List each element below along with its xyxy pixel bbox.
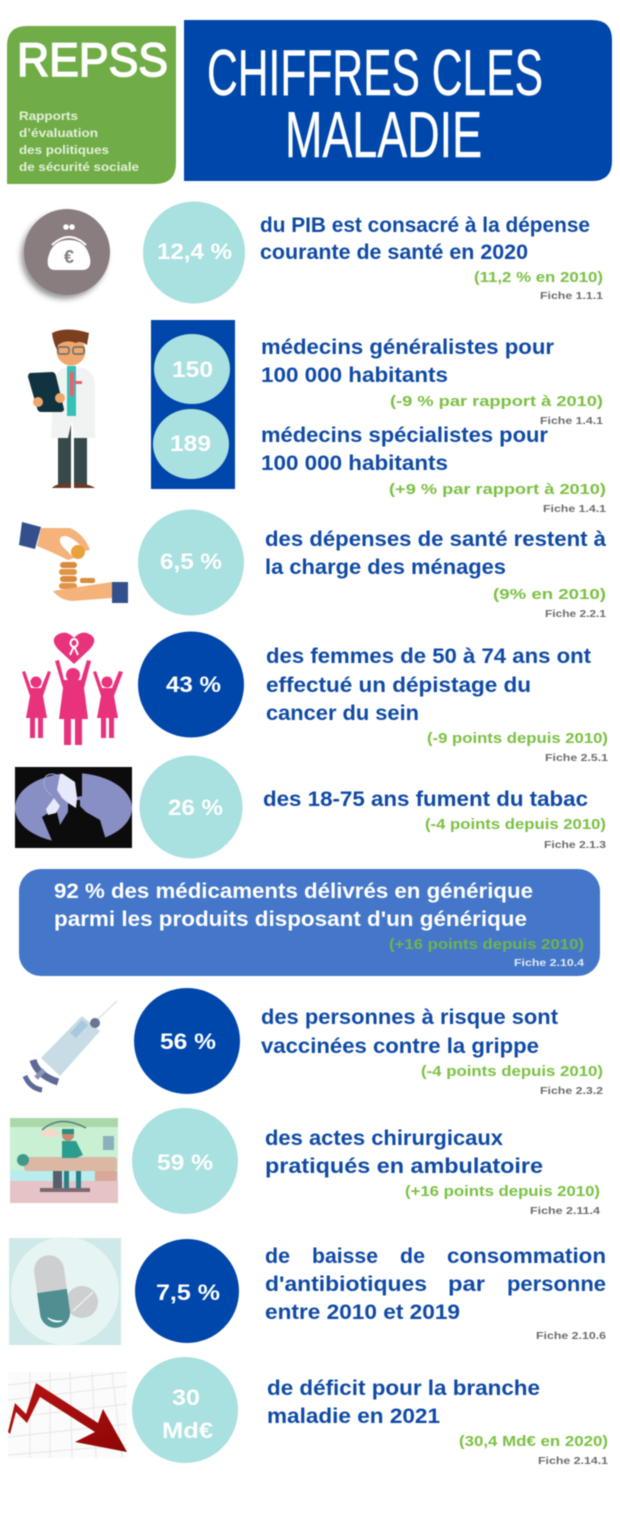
text block (261, 1006, 603, 1097)
text block: pratiqués en ambulatoire (265, 1155, 543, 1178)
text block: Fiche 2.14.1 (538, 1455, 608, 1467)
text block: (+16 points depuis 2010) (405, 1183, 600, 1200)
text block: des femmes de 50 à 74 ans ont (266, 645, 591, 668)
text block: spécialistes: 100 000 habitants (261, 452, 448, 475)
icon: money bag (21, 209, 110, 299)
text block: cancer du sein (266, 702, 419, 725)
text block: consommation (447, 1245, 606, 1268)
text block: Fiche 2.1.3 (544, 839, 606, 851)
stat circle (143, 202, 245, 304)
panel: génériques banner (19, 869, 600, 976)
text block: par (448, 1273, 485, 1296)
panel: REPSS logo (7, 26, 176, 184)
text block: baisse (312, 1245, 378, 1268)
stat circle: 56 % (160, 1029, 216, 1054)
text block: Fiche 2.2.1 (545, 608, 606, 620)
stat circle: 59 % (157, 1150, 213, 1175)
panel: blue counters: 189 (170, 431, 211, 456)
icon: smoker (15, 767, 132, 848)
stat circle (135, 1239, 239, 1343)
text block: généralistes (261, 336, 603, 427)
text block: (-4 points depuis 2010) (425, 816, 606, 833)
text block: spécialistes: (+9 % par rapport à 2010) (389, 481, 606, 498)
panel: blue counters: 150 (172, 357, 213, 382)
text block: Fiche 1.1.1 (540, 290, 603, 302)
panel: génériques banner: Fiche 2.10.4 (514, 957, 584, 969)
text block (265, 1245, 606, 1342)
stat circle: Md€ (162, 1418, 213, 1443)
panel: title banner (184, 20, 612, 181)
stat circle: 26 % (168, 795, 223, 820)
icon: women and ribbon heart (22, 633, 123, 745)
icon: hands and coins (19, 522, 128, 603)
row: reste à charge (19, 510, 606, 620)
row: PIB (21, 202, 603, 304)
text block: personne (507, 1273, 606, 1296)
panel: REPSS logo: Rapports (19, 109, 78, 123)
text block: généralistes: médecins généralistes pour (261, 336, 554, 359)
panel: REPSS logo: d’évaluation (19, 126, 98, 140)
text block: effectué un dépistage du (266, 674, 531, 697)
text block: spécialistes: médecins spécialistes pour (261, 424, 548, 447)
text block: (11,2 % en 2010) (474, 269, 603, 286)
panel: REPSS logo: des politiques (19, 143, 109, 157)
text block (260, 214, 603, 302)
panel: génériques banner: (+16 points depuis 2010) (389, 936, 584, 953)
text block: de (400, 1245, 425, 1268)
text block (265, 1127, 600, 1217)
stat circle: 6,5 % (160, 549, 222, 574)
stat circle: 7,5 % (156, 1280, 220, 1305)
panel: génériques banner: 92 % des médicaments délivrés en générique (54, 880, 533, 903)
stat circle (138, 632, 244, 738)
row: ambulatoire (10, 1108, 600, 1217)
icon: pills (9, 1237, 121, 1345)
text block: d'antibiotiques (265, 1273, 427, 1296)
text block: du PIB est consacré à la dépense (260, 214, 590, 237)
panel: REPSS logo: de sécurité sociale (19, 160, 139, 174)
icon: falling chart arrow (8, 1372, 127, 1458)
panel: blue counters (151, 320, 235, 489)
text block: courante de santé en 2020 (260, 241, 528, 264)
stat circle: 30 (172, 1385, 200, 1410)
icon: operating room (10, 1118, 118, 1203)
text block: spécialistes: Fiche 1.4.1 (543, 503, 606, 515)
text block: entre 2010 et 2019 (265, 1301, 460, 1324)
text block: généralistes: Fiche 1.4.1 (540, 415, 603, 427)
text block (267, 1377, 608, 1467)
row: tabac (15, 756, 606, 858)
stat circle (138, 510, 244, 616)
panel: REPSS logo: REPSS (17, 33, 168, 86)
header (7, 20, 612, 184)
text block: (-9 points depuis 2010) (427, 730, 608, 747)
stat circle (132, 1357, 238, 1463)
stat circle (140, 756, 242, 858)
text block: la charge des ménages (265, 556, 506, 579)
text block: des personnes à risque sont (261, 1006, 558, 1029)
text block: généralistes: (-9 % par rapport à 2010) (390, 393, 603, 410)
text block (263, 788, 606, 851)
text block: Fiche 2.5.1 (545, 752, 608, 764)
stat circle (134, 988, 240, 1094)
icon: syringe (25, 1001, 117, 1090)
text block: (9% en 2010) (493, 586, 606, 603)
text block: Fiche 2.11.4 (530, 1205, 600, 1217)
panel: génériques banner: parmi les produits disposant d'un générique (54, 908, 527, 931)
text block: de déficit pour la branche (267, 1377, 540, 1400)
text block: maladie en 2021 (267, 1405, 440, 1428)
icon: doctor (28, 330, 95, 488)
text block: des actes chirurgicaux (265, 1127, 503, 1150)
text block: (-4 points depuis 2010) (421, 1063, 603, 1080)
text block (266, 645, 608, 764)
stat circle: 43 % (166, 672, 221, 697)
text block: vaccinées contre la grippe (261, 1035, 539, 1058)
text block: des 18-75 ans fument du tabac (263, 788, 588, 811)
row: dépistage (22, 632, 608, 764)
text block: Fiche 2.3.2 (540, 1085, 603, 1097)
row: antibiotiques (9, 1237, 606, 1345)
text block: (30,4 Md€ en 2020) (459, 1433, 608, 1450)
panel: title banner: MALADIE (285, 98, 482, 171)
row: vaccination (25, 988, 603, 1097)
text block: généralistes: 100 000 habitants (261, 364, 448, 387)
stat circle (132, 1108, 238, 1214)
text block: Fiche 2.10.6 (536, 1330, 606, 1342)
text block: spécialistes (261, 424, 606, 515)
text block (265, 528, 606, 620)
text block: des dépenses de santé restent à (265, 528, 606, 551)
stat circle: 12,4 % (157, 239, 232, 264)
row: déficit (8, 1357, 608, 1467)
row: médecins (28, 320, 606, 515)
icon: money bag: € (64, 247, 74, 267)
text block: de (265, 1245, 290, 1268)
